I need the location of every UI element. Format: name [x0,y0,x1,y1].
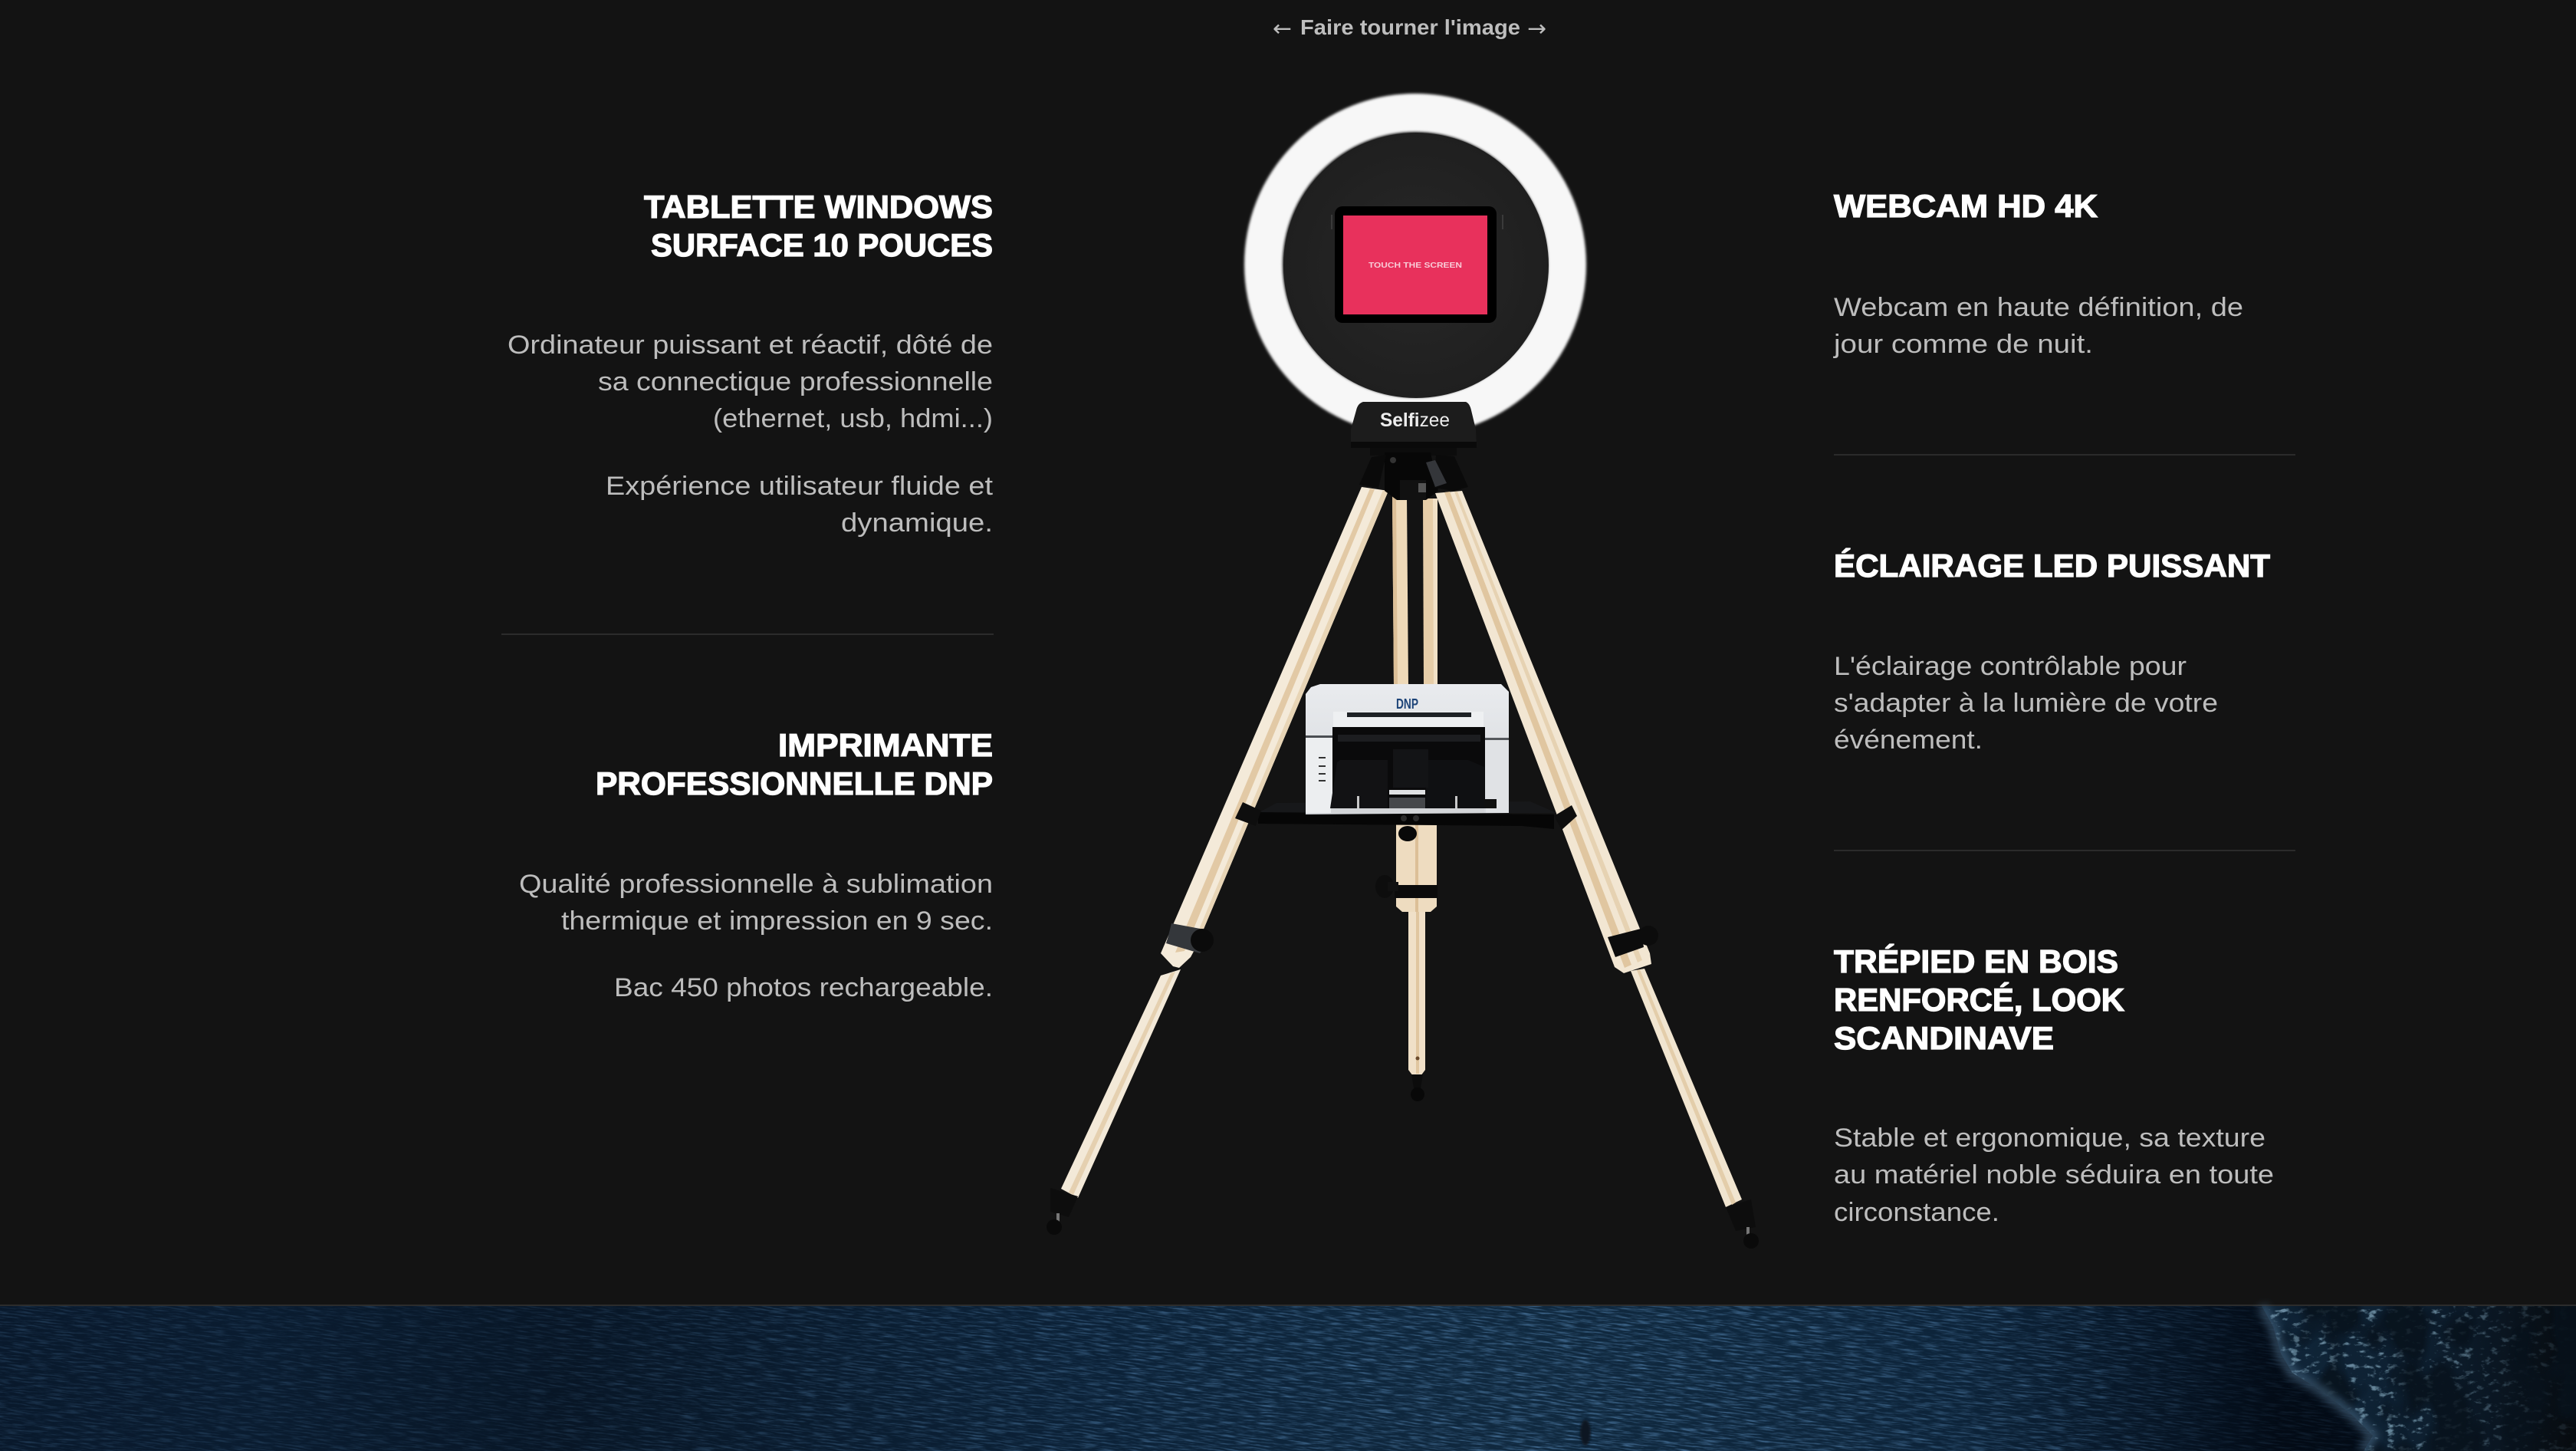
heading: tablette: TABLETTE WINDOWS [644,189,993,225]
text: webcam description: Webcam en haute définition, de [1834,293,2243,322]
rotate hint label: Faire tourner l'image [1300,15,1520,39]
heading: trepied: SCANDINAVE [1834,1020,2054,1056]
heading: imprimante: IMPRIMANTE [778,727,993,763]
selfizee base block [1351,402,1477,448]
text: tablette description: dynamique. [841,508,993,538]
cliff [2254,1306,2576,1451]
text: imprimante description [519,870,993,1002]
text: webcam description [1833,293,2243,359]
tablet [1331,206,1503,323]
text: tablette description: sa connectique professionnelle [598,367,993,396]
feature: tablette windows [508,189,993,538]
heading: trepied: RENFORCÉ, LOOK [1834,982,2124,1018]
clamp: left leg [1166,923,1214,953]
feature: imprimante [519,727,993,1002]
heading: tablette: SURFACE 10 POUCES [651,227,993,263]
small rock in sea [1580,1420,1591,1446]
heading: eclairage: ÉCLAIRAGE LED PUISSANT [1834,548,2270,584]
text: imprimante description: Bac 450 photos rechargeable. [614,973,993,1002]
logo: DNP: DNP [1396,696,1418,712]
clamp: right leg [1608,926,1658,957]
ring light [1263,113,1567,416]
heading: tablette [644,189,993,263]
tripod right leg [1435,491,1759,1249]
sea ripples [0,1306,2576,1451]
sea and cliff photo band [0,1306,2576,1451]
text: tablette description [508,331,993,538]
text: tablette description: Expérience utilisateur fluide et [606,472,993,501]
text: tablette description: Ordinateur puissant et réactif, dôté de [508,331,993,360]
text: eclairage description: événement. [1834,726,1983,755]
text: imprimante description: Qualité professionnelle à sublimation [519,870,993,899]
heading: trepied: TRÉPIED EN BOIS [1834,943,2118,979]
tripod rear bars [1392,496,1438,686]
shoreline foam [2262,1306,2373,1451]
feature: trepied [1834,943,2274,1227]
text: tablette description: (ethernet, usb, hdmi...) [713,404,993,433]
heading: trepied [1834,943,2124,1056]
text: imprimante description: thermique et impression en 9 sec. [561,906,993,936]
rotate hint label: ← [1273,15,1292,41]
text: trepied description: au matériel noble séduira en toute [1834,1160,2274,1189]
text: trepied description: circonstance. [1834,1198,1999,1227]
heading: imprimante: PROFESSIONNELLE DNP [596,765,993,801]
printer DNP [1306,684,1509,814]
footer divider [0,1305,2576,1306]
text: trepied description [1834,1124,2274,1227]
screen label: TOUCH THE SCREEN [1368,261,1462,270]
heading: webcam: WEBCAM HD 4K [1834,188,2098,224]
tripod head [1359,448,1468,500]
sea base [0,1306,2576,1451]
text: eclairage description: L'éclairage contrôlable pour [1834,652,2187,681]
heading: imprimante [596,727,993,801]
text: eclairage description [1834,652,2218,755]
tripod left leg [1046,487,1388,1235]
tripod rear post [1375,821,1438,1101]
feature: webcam [1833,188,2243,359]
tripod shelf [1235,801,1577,830]
product photo: photobooth on tripod [1046,113,1759,1249]
text: trepied description: Stable et ergonomique, sa texture [1834,1124,2266,1153]
feature: eclairage [1834,548,2270,755]
text: webcam description: jour comme de nuit. [1833,330,2093,359]
rotate hint label: → [1527,15,1546,41]
text: eclairage description: s'adapter à la lumière de votre [1834,689,2218,718]
logo: selfizee: Selfizee [1380,410,1450,431]
